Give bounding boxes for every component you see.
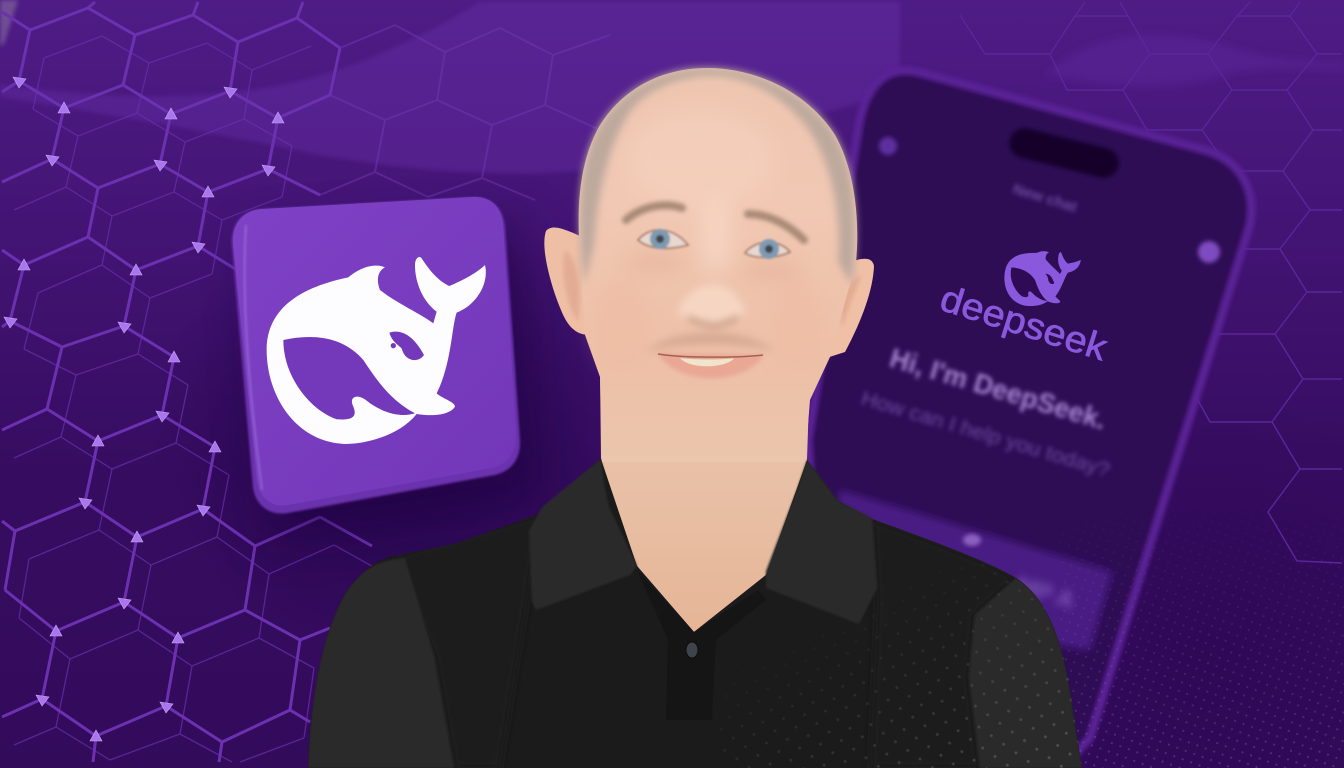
whale	[267, 257, 486, 444]
icon face	[233, 197, 516, 506]
phone notch	[1006, 125, 1122, 181]
nose	[678, 285, 745, 326]
placket	[637, 570, 766, 720]
icon edge highlight	[245, 225, 262, 490]
right sleeve	[969, 578, 1082, 768]
stubble	[580, 68, 856, 285]
left collar	[529, 459, 637, 610]
shirt print dots	[720, 560, 1090, 768]
eyes	[638, 229, 790, 259]
shirt shoulders	[412, 520, 1013, 576]
blurred greeting: Hi, I'm DeepSeek.	[886, 342, 1110, 435]
hexagon network: right	[960, 2, 1342, 563]
halftone dots	[1060, 534, 1344, 768]
hexagon network: upper centre	[320, 25, 610, 200]
deepseek wordmark: deepseek	[936, 278, 1112, 369]
icon shadow	[250, 220, 540, 540]
status dots	[879, 137, 1220, 263]
cheeks and forehead light	[594, 110, 824, 365]
left sleeve	[308, 558, 454, 768]
phone with DeepSeek app	[808, 70, 1251, 760]
nasolabial shading	[646, 332, 776, 352]
DeepSeek app icon	[232, 197, 520, 514]
shirt torso	[308, 459, 1082, 768]
blurred prompt: How can I help you today?	[859, 388, 1112, 482]
icon base	[232, 197, 520, 514]
head silhouette	[579, 68, 857, 462]
mouth	[657, 353, 764, 378]
hexagon network: main layer	[2, 2, 372, 762]
shirt button	[686, 642, 698, 658]
blurred screen title: New chat	[1011, 181, 1079, 216]
man portrait	[308, 68, 1090, 768]
neck	[600, 370, 810, 632]
right collar	[766, 460, 877, 624]
hexagon network: thin offset layer	[14, 36, 386, 762]
input band	[828, 490, 1112, 650]
right ear	[820, 259, 874, 360]
phone body	[808, 70, 1251, 760]
left ear	[544, 227, 590, 335]
eyebrows	[626, 205, 804, 240]
blurred band text: MP A	[1013, 572, 1077, 615]
small whale logo	[998, 240, 1082, 316]
network nodes	[4, 77, 284, 741]
